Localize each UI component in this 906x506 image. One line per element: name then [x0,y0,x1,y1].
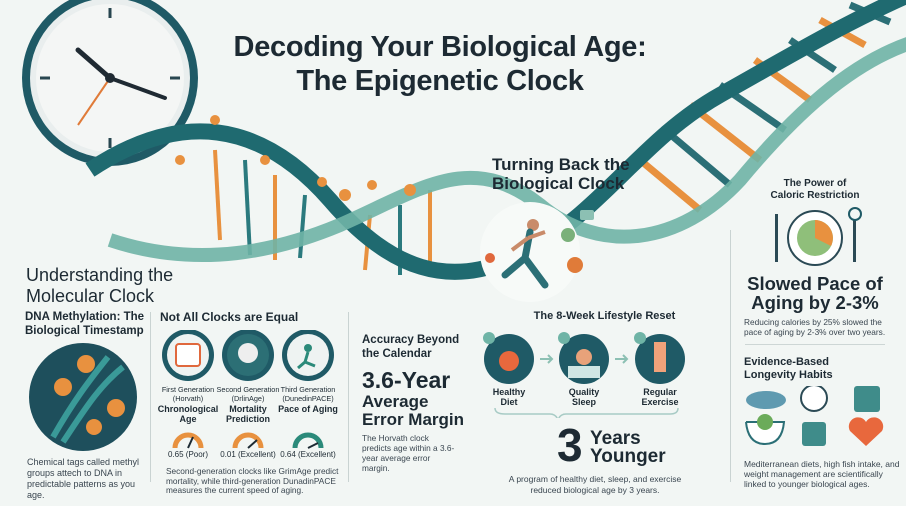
panel: accuracy: 3.6-Year [362,367,450,393]
panel: not all clocks: Third Generation (DunedinPACE) [281,385,335,402]
panel: not all clocks: Not All Clocks are Equal [160,310,298,324]
panel: accuracy: Accuracy Beyond the Calendar [362,334,459,360]
title [234,31,646,97]
panel: DNA methylation: DNA Methylation: The Biological Timestamp [25,311,144,337]
panel: accuracy: The Horvath clock predicts age within a 3.6-year average error margin. [362,433,454,473]
panel: accuracy: Average [362,392,428,411]
icons: diet sleep exercise [483,332,685,418]
title: The Epigenetic Clock [296,65,584,97]
icon: wall clock [22,0,198,166]
panel: longevity habits: Evidence-Based Longevity Habits [744,356,833,381]
heading: turning back: Turning Back the [492,155,630,174]
panel: DNA methylation [25,311,144,500]
panel: lifestyle reset: Quality Sleep [569,387,599,407]
panel: not all clocks: 0.01 (Excellent) [220,450,276,459]
panel: lifestyle reset: The 8-Week Lifestyle Reset [534,310,675,322]
panel: not all clocks: Mortality Prediction [226,404,270,424]
panel: longevity habits: Mediterranean diets, high fish intake, and weight management are scientifically linked to younger biological ages. [744,459,899,489]
heading: turning back [492,155,630,193]
panel: accuracy: Error Margin [362,410,464,429]
panel: not all clocks: Second Generation (DrlinAge) [217,385,279,402]
panel: not all clocks: Pace of Aging [278,404,338,414]
panel: not all clocks [158,310,338,495]
panel: caloric restriction: Slowed Pace of Aging by 2-3% [747,273,883,313]
panel: lifestyle reset: Healthy Diet [493,387,525,407]
panel: lifestyle reset: A program of healthy diet, sleep, and exercise reduced biological age by 3 years. [509,474,681,495]
icons: habits [745,386,884,446]
panel: caloric restriction: Caloric Restriction [771,190,859,201]
panel: DNA methylation: Chemical tags called methyl groups attech to DNA in predictable patterns as you age. [27,457,139,500]
panel: lifestyle reset: Years [590,428,641,449]
panel: not all clocks: Second-generation clocks like GrimAge predict mortality, while third-generation DunadinPACE measures the current speed of aging. [166,466,338,495]
icons: three clocks [162,330,334,449]
heading: turning back: Biological Clock [492,174,624,193]
runner illustration [480,202,594,302]
panel: not all clocks: Chronological Age [158,404,218,424]
heading: understanding: Understanding the Molecular Clock [26,265,173,306]
title: Decoding Your Biological Age: [234,31,646,63]
panel: lifestyle reset: Younger [590,446,666,467]
panel: not all clocks: First Generation (Horvath) [162,385,214,402]
panel: caloric restriction: The Power of [784,178,846,189]
DNA helix [90,0,906,275]
panel: caloric restriction: Reducing calories by 25% slowed the pace of aging by 2-3% over two years. [744,317,885,337]
panel: not all clocks: 0.65 (Poor) [168,450,208,459]
panel: lifestyle reset: 3 [557,419,583,471]
panel: lifestyle reset: Regular Exercise [641,387,679,407]
panel: not all clocks: 0.64 (Excellent) [280,450,336,459]
panel: caloric restriction [744,178,885,337]
panel: longevity habits [744,356,899,489]
icon: plate [775,207,862,266]
icon: methylation circle [29,343,137,451]
panel: accuracy [362,334,464,473]
panel: lifestyle reset [483,310,685,495]
